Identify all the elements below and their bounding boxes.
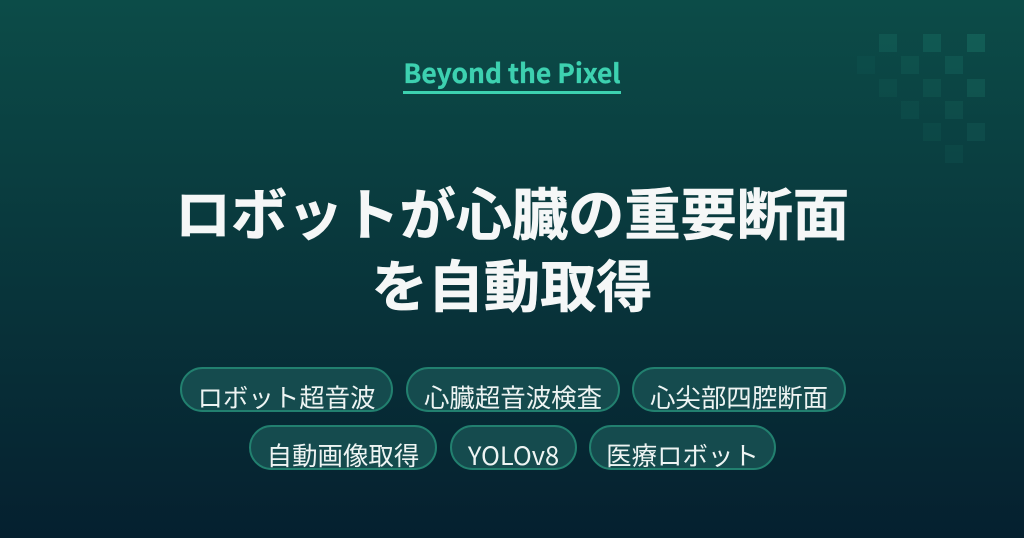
brand label: Beyond the Pixel: Beyond the Pixel (403, 52, 621, 91)
tag: 心尖部四腔断面 (632, 367, 846, 412)
title: ロボットが心臓の重要断面 (175, 171, 849, 252)
title (175, 171, 849, 324)
tag: 自動画像取得 (249, 425, 437, 470)
tag: YOLOv8 (450, 425, 577, 470)
tag: 医療ロボット (589, 425, 776, 470)
tag: ロボット超音波 (180, 367, 393, 412)
title: を自動取得 (372, 243, 652, 324)
tag: 心臓超音波検査 (406, 367, 620, 412)
decorative pixel grid (879, 34, 985, 141)
